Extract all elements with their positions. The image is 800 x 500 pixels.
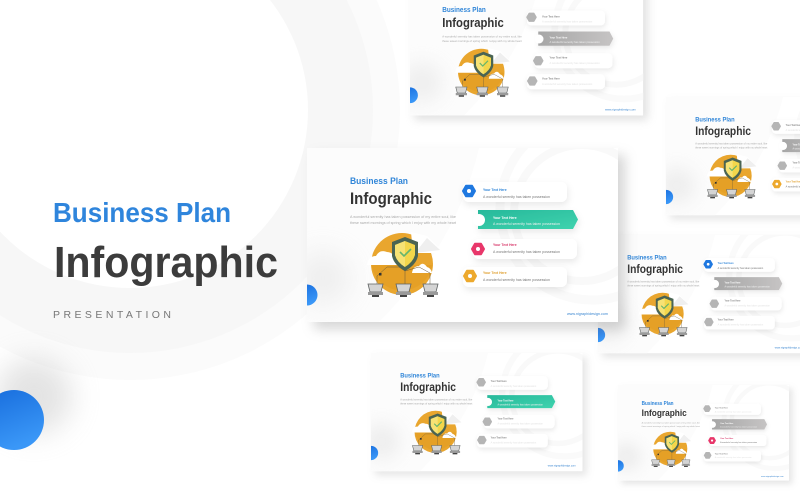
slide preview: top: Your Text Here <box>542 76 560 81</box>
slide preview: top: Your Text Here <box>550 56 568 60</box>
slide preview: bottom right <box>612 367 800 484</box>
slide preview: middle right: Your Text Here <box>724 300 741 303</box>
page background arcs <box>0 0 400 380</box>
slide preview: middle right: Infographic <box>627 264 684 276</box>
slide preview: bottom centre <box>364 331 627 475</box>
slide preview: bottom right: A wonderful serenity has taken possession <box>715 411 752 414</box>
blue circle with soft shadow <box>0 358 72 450</box>
slide preview: top: Infographic <box>442 15 504 30</box>
card: pink <box>472 239 577 259</box>
card: blue: Your Text Here <box>483 188 507 192</box>
slide preview: middle right: A wonderful serenity has taken possession <box>718 323 764 326</box>
slide preview: right <box>659 75 800 219</box>
slide preview: top: A wonderful serenity has taken possession <box>542 20 593 24</box>
slide preview: middle right: A wonderful serenity has taken possession of my entire soul, like <box>627 280 700 284</box>
slide preview: top: www.nigraphidesign.com <box>605 107 636 111</box>
slide preview: bottom right: A wonderful serenity has taken possession <box>715 456 752 459</box>
slide preview: bottom centre: Your Text Here <box>491 380 507 383</box>
slide preview: top: A wonderful serenity has taken possession <box>542 82 593 86</box>
slide preview: bottom right: Your Text Here <box>715 452 728 455</box>
card: orange <box>463 267 567 287</box>
slide preview: bottom centre: Your Text Here <box>491 437 507 440</box>
slide preview: bottom right: Your Text Here <box>720 437 733 440</box>
subheading: Presentation: PRESENTATION <box>53 309 171 321</box>
website url: www.nigraphidesign.com <box>567 312 608 316</box>
slide preview: middle right: A wonderful serenity has taken possession <box>718 267 764 270</box>
slide preview: right: these sweet mornings of spring which I enjoy with my whole heart <box>695 146 768 150</box>
slide preview: bottom centre: A wonderful serenity has taken possession <box>497 403 544 406</box>
slide preview: top: A wonderful serenity has taken possession <box>550 61 600 65</box>
slide heading: Business Plan <box>350 176 408 187</box>
card: orange: Your Text Here <box>483 271 507 275</box>
card: pink: Your Text Here <box>493 243 517 247</box>
slide preview: bottom right: Your Text Here <box>715 407 728 410</box>
card: orange: A wonderful serenity has taken possession <box>483 278 550 282</box>
slide preview: middle right: www.nigraphidesign.com <box>775 347 800 350</box>
heading: Infographic: Infographic <box>54 238 278 287</box>
slide preview: top: Your Text Here <box>550 35 568 39</box>
slide preview: bottom centre: A wonderful serenity has taken possession of my entire soul, like <box>400 398 473 402</box>
slide preview: bottom centre: A wonderful serenity has taken possession <box>497 422 544 425</box>
slide preview: bottom centre: Your Text Here <box>497 399 514 402</box>
slide preview: bottom centre: these sweet mornings of spring which I enjoy with my whole heart <box>400 402 473 406</box>
slide preview: bottom centre: Business Plan <box>400 372 440 379</box>
slide preview: middle right: Your Text Here <box>724 281 741 284</box>
slide preview: middle right: Your Text Here <box>718 319 734 322</box>
slide preview: right: Business Plan <box>695 116 735 123</box>
slide heading <box>350 176 432 208</box>
slide preview: top: Your Text Here <box>542 14 560 18</box>
illustration: shield, globe and network of laptops <box>367 232 441 297</box>
slide preview: top: A wonderful serenity has taken possession <box>550 40 600 44</box>
slide preview: bottom right: Infographic <box>642 408 687 418</box>
card: teal arrow <box>473 210 578 229</box>
slide preview: bottom centre: Infographic <box>400 382 457 394</box>
slide preview: bottom right: A wonderful serenity has taken possession <box>720 425 757 428</box>
card: blue <box>463 182 567 202</box>
slide preview: right: A wonderful serenity has taken possession of my entire soul, like <box>695 142 768 146</box>
slide preview: bottom right: A wonderful serenity has taken possession <box>720 441 757 444</box>
slide body text: A wonderful serenity has taken possession of my entire soul, like <box>350 215 456 219</box>
panel: main slide <box>296 116 684 329</box>
slide preview: bottom centre: www.nigraphidesign.com <box>548 465 576 468</box>
slide body text <box>350 215 457 225</box>
slide preview: top: these sweet mornings of spring which I enjoy with my whole heart <box>442 39 522 43</box>
slide preview: bottom right: Your Text Here <box>720 422 733 425</box>
card: teal arrow: A wonderful serenity has taken possession <box>493 222 560 226</box>
slide preview: bottom centre: Your Text Here <box>497 418 514 421</box>
slide body text: these sweet mornings of spring which I enjoy with my whole heart <box>350 221 457 225</box>
slide heading: Infographic <box>350 189 432 208</box>
slide preview: bottom right: Business Plan <box>642 401 674 407</box>
slide preview: bottom right: these sweet mornings of spring which I enjoy with my whole heart <box>642 425 700 428</box>
card: pink: A wonderful serenity has taken possession <box>493 250 560 254</box>
slide preview: middle right: Your Text Here <box>718 262 734 265</box>
slide preview: top <box>402 0 693 120</box>
slide preview: bottom right: www.nigraphidesign.com <box>761 476 784 478</box>
slide preview: right: Infographic <box>695 126 752 138</box>
slide preview: middle right: these sweet mornings of spring which I enjoy with my whole heart <box>627 284 700 288</box>
slide preview: bottom centre: A wonderful serenity has taken possession <box>491 385 537 388</box>
heading: Business Plan: Business Plan <box>53 197 231 228</box>
slide preview: bottom right: A wonderful serenity has taken possession of my entire soul, like <box>642 421 701 424</box>
slide preview: top: Business Plan <box>442 6 486 14</box>
slide preview: top: A wonderful serenity has taken possession of my entire soul, like <box>442 34 522 39</box>
slide preview: middle right: A wonderful serenity has taken possession <box>724 304 771 307</box>
card: blue: A wonderful serenity has taken possession <box>483 195 550 199</box>
slide preview: middle right: Business Plan <box>627 254 667 261</box>
slide preview: middle right <box>591 213 800 357</box>
card: teal arrow: Your Text Here <box>493 216 517 220</box>
slide preview: bottom centre: A wonderful serenity has taken possession <box>491 441 537 444</box>
slide preview: middle right: A wonderful serenity has taken possession <box>724 285 771 288</box>
